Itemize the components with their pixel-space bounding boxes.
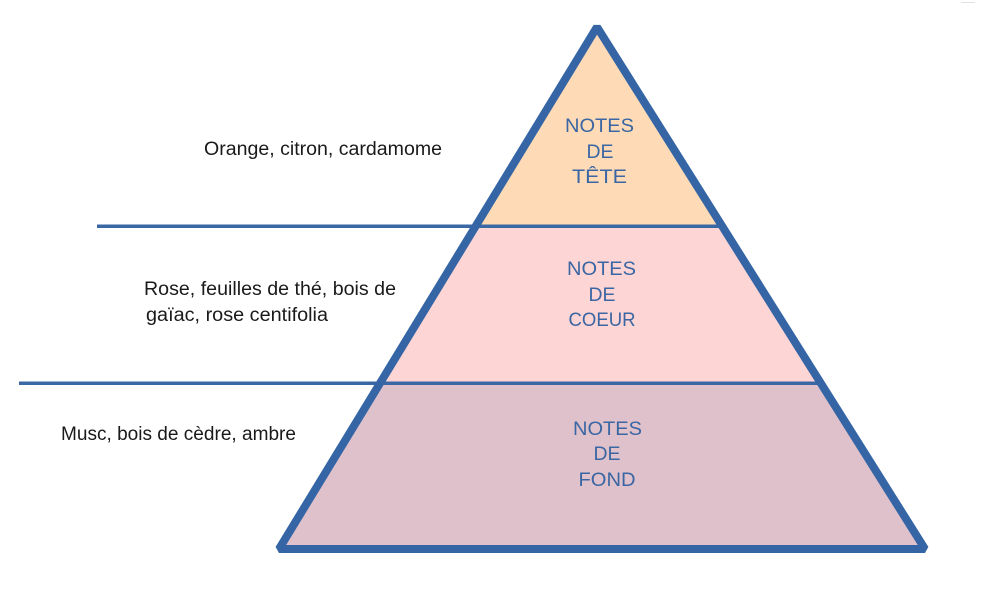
layer: base notes — [279, 383, 925, 549]
divider: top and heart notes — [97, 224, 722, 228]
label: notes de tete: NOTES — [565, 116, 634, 137]
label: notes de coeur: COEUR — [568, 310, 636, 331]
layer: heart notes — [379, 226, 820, 383]
text: top notes ingredients: Orange, citron, cardamome — [204, 139, 442, 160]
text: heart notes ingredients: Rose, feuilles de thé, bois de — [144, 279, 396, 300]
layer: top notes — [475, 27, 719, 226]
text: heart notes ingredients: gaïac, rose centifolia — [146, 305, 328, 326]
text: base notes ingredients: Musc, bois de cèdre, ambre — [61, 424, 296, 445]
divider: heart and base notes — [19, 382, 821, 385]
label: notes de coeur: NOTES — [567, 259, 636, 280]
label: notes de fond — [573, 419, 642, 491]
label: notes de fond: FOND — [578, 470, 636, 491]
label: notes de fond: DE — [594, 444, 620, 465]
label: notes de coeur — [567, 259, 636, 331]
label: notes de tete: DE — [586, 142, 614, 163]
label: notes de coeur: DE — [588, 285, 616, 306]
label: notes de tete: TÊTE — [572, 166, 627, 188]
pyramid outline — [279, 27, 925, 549]
label: notes de fond: NOTES — [573, 419, 642, 440]
label: notes de tete — [565, 116, 634, 188]
text: heart notes ingredients — [144, 279, 396, 326]
